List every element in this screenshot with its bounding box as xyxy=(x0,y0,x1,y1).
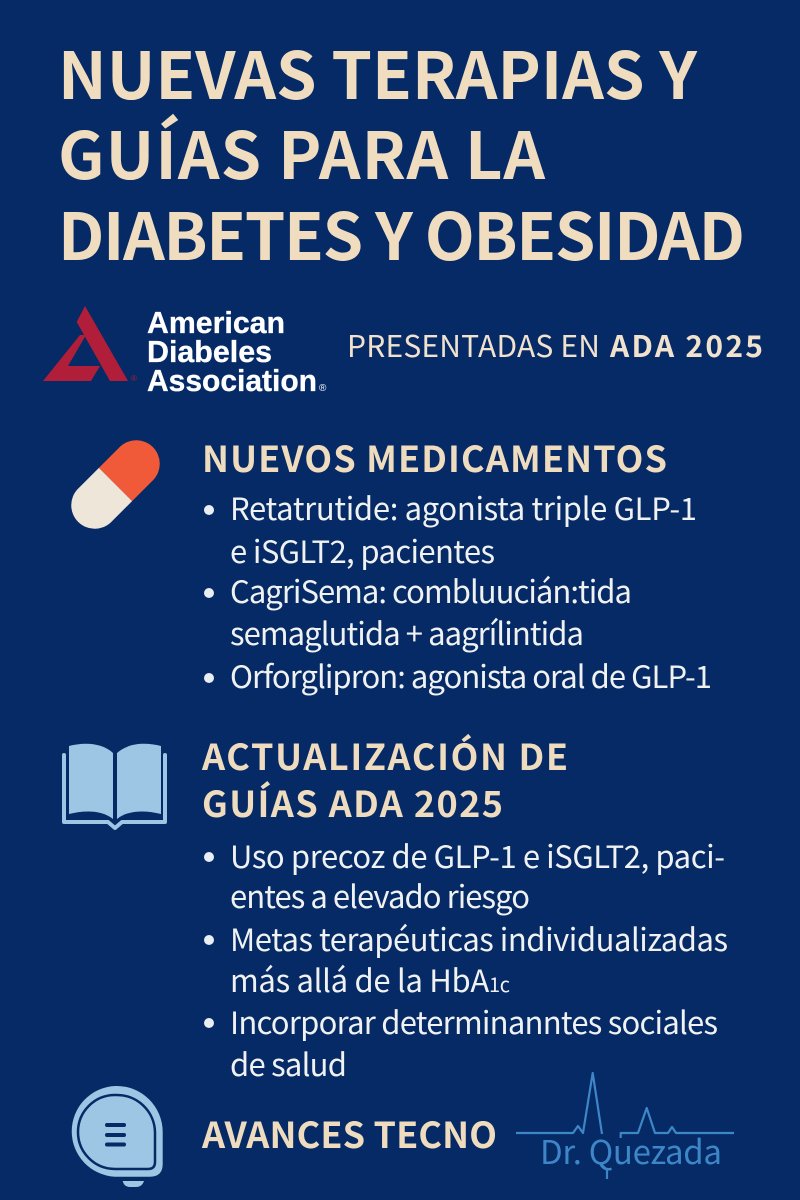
heading: new medications: NUEVOS MEDICAMENTOS xyxy=(202,431,667,483)
title: DIABETES Y OBESIDAD xyxy=(58,185,745,279)
medication list: Orforglipron: agonista oral de GLP-1 xyxy=(230,652,712,697)
heading: technology advances: AVANCES TECNO xyxy=(201,1107,497,1159)
heading: guideline updates xyxy=(201,729,568,828)
guideline list: más allá de la HbA1c xyxy=(230,956,510,1001)
icon: red triangle mark xyxy=(43,306,137,383)
medication list: e iSGLT2, pacientes xyxy=(230,527,495,572)
logo: American Diabetes Association xyxy=(43,305,327,398)
signature text: Dr. Quezada xyxy=(540,1126,722,1174)
guideline list: Incorporar determinanntes sociales xyxy=(230,998,718,1043)
logo wordmark: Diabeles xyxy=(147,334,272,369)
title: NUEVAS TERAPIAS Y xyxy=(58,24,698,118)
subtitle: presented at ADA 2025: ADA 2025 xyxy=(609,322,763,366)
medication list: semaglutida + aagrílintida xyxy=(230,609,584,654)
logo: Dr. Quezada signature xyxy=(516,1073,734,1179)
title: GUÍAS PARA LA xyxy=(58,104,545,198)
logo wordmark: American xyxy=(147,305,285,340)
logo wordmark xyxy=(147,305,327,398)
subtitle: presented at ADA 2025 xyxy=(347,322,763,366)
guideline list: Uso precoz de GLP-1 e iSGLT2, paci- xyxy=(230,832,725,877)
medication list: CagriSema: combluucián:tida xyxy=(230,567,632,612)
panel: ADA 2025 guideline updates xyxy=(201,729,728,1085)
ECG trace xyxy=(516,1073,734,1179)
guideline list: Metas terapéuticas individualizadas xyxy=(230,915,728,960)
panel: new medications xyxy=(202,431,712,697)
medication list xyxy=(204,484,712,697)
heading: guideline updates: GUÍAS ADA 2025 xyxy=(202,776,503,828)
icon: glucose sensor device xyxy=(72,1086,163,1187)
icon: open book xyxy=(64,744,165,828)
guideline list: de salud xyxy=(230,1040,347,1085)
guideline list xyxy=(204,832,728,1085)
logo wordmark: Association xyxy=(147,363,317,398)
heading: guideline updates: ACTUALIZACIÓN DE xyxy=(201,729,568,781)
title xyxy=(58,24,745,279)
guideline list: entes a elevado riesgo xyxy=(230,872,530,917)
logo wordmark: ® xyxy=(319,383,327,394)
icon: red triangle mark: ® xyxy=(131,374,137,383)
subtitle: presented at ADA 2025: PRESENTADAS EN xyxy=(347,322,600,366)
icon: pill capsule xyxy=(71,440,160,529)
medication list: Retatrutide: agonista triple GLP-1 xyxy=(230,484,697,529)
